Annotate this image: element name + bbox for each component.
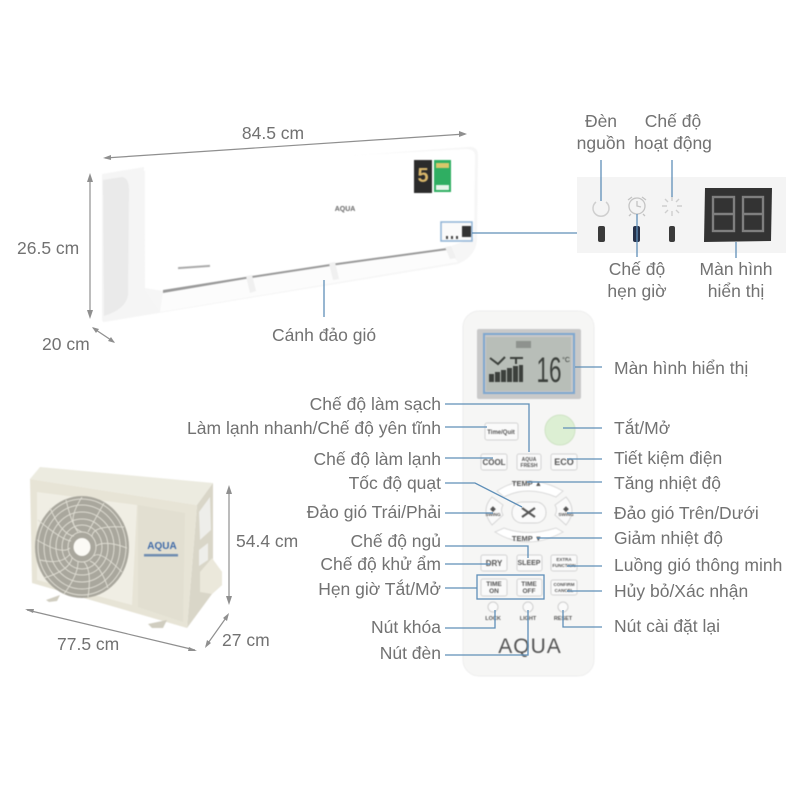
dimension: outdoor depth: 27 cm <box>222 630 270 650</box>
button: swing left right: SWING <box>485 512 501 517</box>
button: extra function: EXTRA <box>556 557 572 562</box>
callout: temperature down: Giảm nhiệt độ <box>614 528 723 548</box>
top face <box>30 467 213 505</box>
button: TIME ON: ON <box>489 588 499 595</box>
callout: clean mode <box>310 394 529 452</box>
callout: fan speed <box>349 473 522 507</box>
callout: operating mode <box>634 111 712 197</box>
button: TEMP down <box>495 528 563 543</box>
panel: outdoor unit <box>30 467 222 628</box>
panel: indicator display <box>472 177 786 253</box>
button: confirm cancel: CONFIRM <box>554 582 575 587</box>
display highlight box <box>441 222 472 241</box>
icon: sun <box>662 196 682 216</box>
callout: quick cool: Làm lạnh nhanh/Chế độ yên tĩnh <box>187 418 441 438</box>
digital display <box>704 188 772 242</box>
callout: operating mode: hoạt động <box>634 133 712 153</box>
drain cap <box>200 558 222 594</box>
right panel <box>138 505 185 622</box>
energy label <box>414 160 451 193</box>
dimension: indoor width: 84.5 cm <box>242 123 304 143</box>
button: TIME OFF: OFF <box>522 588 536 595</box>
air flap <box>160 249 458 312</box>
dimension: outdoor depth <box>205 613 270 650</box>
button: swing up down: ◆ <box>562 506 569 513</box>
LCD screen: °C <box>562 356 570 364</box>
dimension: indoor width <box>103 123 467 160</box>
front panel <box>145 149 475 291</box>
callout: air flap: Cánh đảo gió <box>272 325 376 345</box>
fan grille <box>35 492 137 605</box>
button: fan speed <box>512 502 546 523</box>
remote body <box>463 311 594 676</box>
button: RESET <box>554 602 573 622</box>
button: confirm cancel: CANCEL <box>555 588 574 593</box>
callout: power light: Đèn <box>585 111 617 131</box>
button: TEMP down: TEMP ▼ <box>512 534 542 543</box>
indicator lights <box>598 226 675 242</box>
inverter mark <box>144 554 178 556</box>
callout: timer mode: hẹn giờ <box>607 281 667 301</box>
button: AQUA FRESH: FRESH <box>521 463 538 469</box>
callout: power light: nguồn <box>577 133 625 153</box>
side face <box>187 483 222 628</box>
brand logo: AQUA <box>335 206 355 213</box>
button: extra function <box>551 555 577 571</box>
button: swing left right: ◆ <box>489 506 496 513</box>
panel: indoor unit <box>102 147 478 322</box>
unit body <box>102 147 478 322</box>
button: LOCK <box>485 602 501 622</box>
callout: light <box>380 610 528 663</box>
callout: display screen: Màn hình <box>700 259 772 279</box>
button: RESET: RESET <box>554 616 573 622</box>
callout: dry mode: Chế độ khử ẩm <box>320 554 441 574</box>
callout: display screen <box>700 242 772 301</box>
button: TEMP up <box>497 479 563 497</box>
button: TEMP up: TEMP ▲ <box>512 479 542 488</box>
dimension: indoor depth <box>42 327 115 354</box>
inverter mark <box>178 265 210 269</box>
callout: reset: Nút cài đặt lại <box>614 616 720 636</box>
dimension: indoor height <box>17 173 93 319</box>
button: AQUA FRESH: AQUA <box>522 457 537 463</box>
icon: power <box>593 202 609 216</box>
button: Time/Quit: Time/Quit <box>487 430 515 436</box>
LCD screen <box>477 329 581 399</box>
callout: operating mode: Chế độ <box>645 111 701 131</box>
callout: on off <box>563 417 670 438</box>
button: confirm cancel <box>551 580 577 595</box>
callout: timer mode <box>607 214 667 301</box>
callout: display screen: hiển thị <box>708 281 764 301</box>
dimension: outdoor width <box>25 609 197 654</box>
callout: lock <box>371 610 495 637</box>
button: TIME ON <box>481 579 507 596</box>
dimension: indoor depth: 20 cm <box>42 334 90 354</box>
side labels <box>199 497 211 566</box>
button: COOL <box>481 454 507 470</box>
button: LOCK: LOCK <box>485 616 501 622</box>
button: COOL: COOL <box>482 458 506 467</box>
callout: lock: Nút khóa <box>371 617 441 637</box>
air vent <box>163 248 447 293</box>
button: swing up down: SWING <box>558 512 574 517</box>
callout: swing left right: Đảo gió Trái/Phải <box>307 502 441 522</box>
button: swing left right <box>485 497 503 525</box>
brand logo: AQUA <box>147 541 177 552</box>
callout: sleep mode: Chế độ ngủ <box>350 531 441 551</box>
icon: alarm clock <box>628 197 646 216</box>
button: AQUA FRESH <box>517 454 541 470</box>
callout: timer on off <box>318 575 544 599</box>
dimension: outdoor width: 77.5 cm <box>57 634 119 654</box>
button: power <box>545 415 575 445</box>
button: SLEEP: SLEEP <box>518 560 541 567</box>
LCD screen: 16 <box>536 351 562 390</box>
callout: on off: Tắt/Mở <box>614 417 670 438</box>
button: LIGHT <box>520 602 537 622</box>
button: swing up down <box>555 497 574 525</box>
front face <box>30 479 197 628</box>
button: DRY: DRY <box>486 559 503 568</box>
callout: timer on off: Hẹn giờ Tắt/Mở <box>318 578 441 599</box>
button: ECO: ECO <box>554 457 574 467</box>
button: SLEEP <box>517 555 542 571</box>
callout: sleep mode <box>350 531 528 558</box>
button: ECO <box>551 454 577 470</box>
button: DRY <box>481 555 507 571</box>
side cap <box>102 167 160 322</box>
callout: timer mode: Chế độ <box>609 259 665 279</box>
callout: power light <box>577 111 625 201</box>
panel: remote control <box>463 311 594 676</box>
brand logo: AQUA <box>498 635 562 658</box>
button: Time/Quit <box>485 423 518 440</box>
callout: reset <box>563 610 720 636</box>
button: TIME OFF: TIME <box>521 581 537 588</box>
flap clips <box>246 246 456 293</box>
dimension: outdoor height: 54.4 cm <box>236 531 298 551</box>
callout: light: Nút đèn <box>380 643 441 663</box>
callout: air flap <box>272 280 376 345</box>
feet <box>46 595 167 628</box>
callout: clean mode: Chế độ làm sạch <box>310 394 441 414</box>
callout: cool mode: Chế độ làm lạnh <box>314 449 441 469</box>
callout: energy saving: Tiết kiệm điện <box>614 448 722 468</box>
energy label: 5 <box>417 165 429 187</box>
callout: remote screen: Màn hình hiển thị <box>614 358 748 378</box>
dimension: outdoor height <box>226 485 298 605</box>
button: extra function: FUNCTION <box>552 563 576 568</box>
callout: smart airflow: Luồng gió thông minh <box>614 555 782 575</box>
button: TIME OFF <box>517 579 542 596</box>
callout: swing up down: Đảo gió Trên/Dưới <box>614 503 759 523</box>
callout: cancel confirm: Hủy bỏ/Xác nhận <box>614 581 748 601</box>
callout: temperature up: Tăng nhiệt độ <box>614 473 721 493</box>
button: LIGHT: LIGHT <box>520 616 537 622</box>
button: TIME ON: TIME <box>486 581 502 588</box>
callout: fan speed: Tốc độ quạt <box>349 473 441 493</box>
dimension: indoor height: 26.5 cm <box>17 238 79 258</box>
